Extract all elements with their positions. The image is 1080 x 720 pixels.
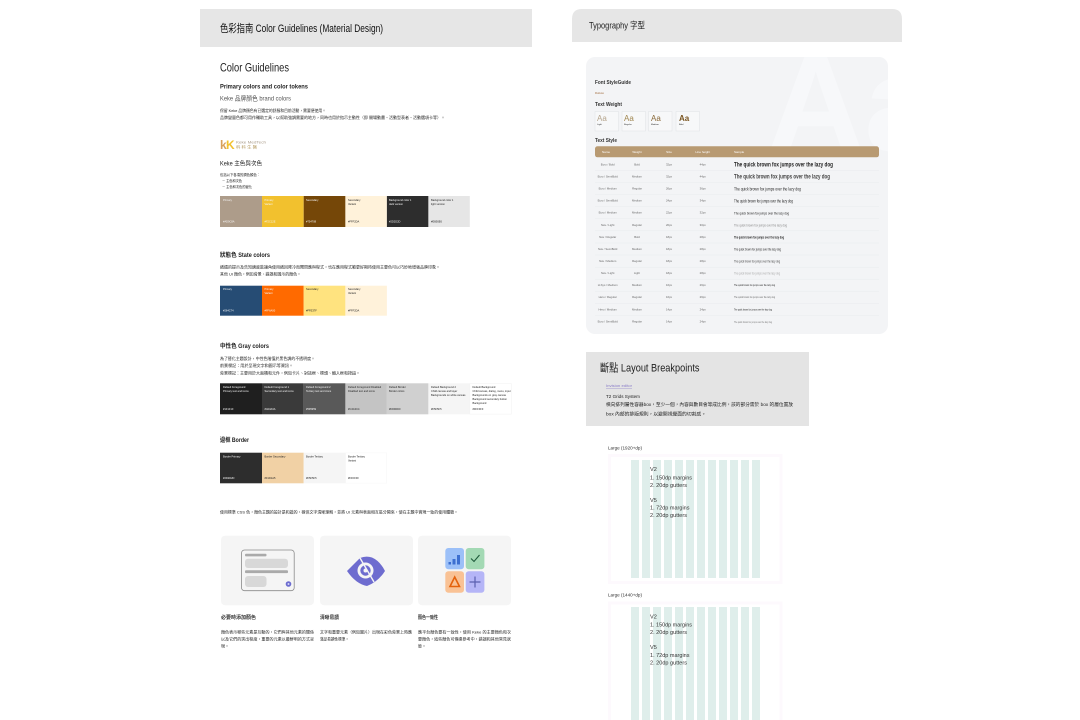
swatch row: primary colors: Background color 1 <box>389 198 412 202</box>
table rows: 26px <box>700 295 706 299</box>
weight samples: Regular <box>624 123 632 126</box>
swatch row: gray colors: Default Foreground Disabled <box>348 385 382 389</box>
table rows: The quick brown fox jumps over the lazy dog <box>734 210 789 215</box>
panel: clear and readable <box>320 536 413 605</box>
table rows: Nav / Regular <box>599 235 616 239</box>
swatch row: border colors: Border Tertiary <box>306 454 324 458</box>
swatch row: gray colors: Border colors <box>389 389 405 393</box>
panel: color consistency <box>418 536 511 605</box>
table rows: Medium <box>632 247 643 251</box>
swatch row: gray colors: Disabled text and icons <box>348 389 376 393</box>
table rows: The quick brown fox jumps over the lazy dog <box>734 308 772 312</box>
panel: add color when needed <box>221 536 314 605</box>
swatch row: gray colors: Default Foreground 1 <box>264 385 290 389</box>
swatch row: primary colors: Primary <box>223 198 233 202</box>
swatch row: primary colors: Background color 1 <box>431 198 454 202</box>
panel: typography header <box>572 9 902 42</box>
swatch row: state colors: Secondary <box>348 287 361 291</box>
swatch row: gray colors: #C4C4C4 <box>348 407 360 411</box>
text block: color consistency: 應平台顏色要有一致性，使用 Keke 的主要顏色和次 <box>418 628 511 634</box>
subheading: brand colors: Keke 品牌顏色 brand colors <box>220 94 292 102</box>
table rows: Medium <box>632 211 643 215</box>
icon: colorful tile grid <box>445 548 484 593</box>
text block: add color when needed: 以及它們的突出程度，重要的元素以最鮮明的方式呈 <box>221 636 314 642</box>
grid notes: V5 <box>650 645 657 651</box>
icon: keke medtech logo: 科 科 生 醫 <box>236 144 257 150</box>
table rows: The quick brown fox jumps over the lazy dog <box>734 174 830 180</box>
icon: keke medtech logo <box>220 138 266 152</box>
text block: gray colors description <box>220 355 360 376</box>
table rows: The quick brown fox jumps over the lazy dog <box>734 283 775 287</box>
swatch row: state colors: Secondary <box>306 287 319 291</box>
table rows: The quick brown fox jumps over the lazy dog <box>734 247 781 251</box>
grid notes <box>650 467 692 519</box>
swatch row: gray colors: #595959 <box>306 407 317 411</box>
swatch row: border colors: #2D2D2D <box>223 476 235 480</box>
swatch row: gray colors <box>220 383 511 414</box>
table rows: 24px <box>666 199 673 203</box>
weight samples: Light <box>597 123 602 126</box>
table rows: The quick brown fox jumps over the lazy dog <box>734 271 780 275</box>
table rows: 30px <box>700 223 706 227</box>
panel: color guidelines header <box>200 9 532 47</box>
swatch row: gray colors: #F5F5F5 <box>431 407 442 411</box>
text block: palette list: － 主色和次色 <box>222 178 243 183</box>
grid notes: 1. 150dp margins <box>650 622 692 628</box>
text block: grid description: box 內部的排版規則，以避開視覺面的切割感。 <box>606 410 706 418</box>
text block: state colors description <box>220 264 440 276</box>
text block: state colors description: 遞還的提示及告知適度能讓角使用遞回降冷而聞問應與程式，也在應用程式範更好期待使用主要色可以巧妙地增強品牌印象。 <box>220 264 440 270</box>
table rows: 24px <box>700 320 706 324</box>
swatch row: state colors: #264C74 <box>223 308 234 312</box>
weight samples: Aa <box>651 114 661 123</box>
swatch row: border colors: Border Secondary <box>264 454 286 458</box>
table rows: 32px <box>700 211 706 215</box>
table rows: Regular <box>632 223 642 227</box>
watermark: large Aa: Aa <box>767 28 940 179</box>
text block: gray colors description: 前景標記：用於呈現文字和圖示等資訊。 <box>220 362 293 368</box>
text block: add color when needed <box>221 614 314 648</box>
text block: brand color intro: 品牌變量色都可用作輔助工具，以幫助強調需要的地方，同時也用於指示主動性（即 開場動畫、活動型表者、活動選項卡等）。 <box>220 114 445 120</box>
swatch row: gray colors: Background secondary button <box>472 397 508 401</box>
table header <box>595 146 879 157</box>
table rows: 28px <box>700 271 706 275</box>
swatch row: border colors: #FFFFFF <box>348 476 359 480</box>
icon: eye <box>347 557 385 586</box>
table header: Line height <box>695 150 710 154</box>
table rows: The quick brown fox jumps over the lazy dog <box>734 186 801 192</box>
swatch row: gray colors: #1F1F1F <box>223 407 234 411</box>
table rows: 28px <box>700 259 706 263</box>
table rows: 26px <box>700 283 706 287</box>
text block: color consistency: 要顏色，這些顏色可傳達參考中，錯誤和其他常見狀 <box>418 636 511 642</box>
table rows: 18px <box>666 247 673 251</box>
table rows: The quick brown fox jumps over the lazy dog <box>734 162 833 168</box>
table rows: 32px <box>666 174 673 178</box>
text block: palette list: 包括以下各項的調色顏色： <box>220 172 260 177</box>
table rows: 14px <box>666 320 673 324</box>
table rows: Nav / Medium <box>599 259 617 263</box>
swatch row: state colors: #FF6A00 <box>264 308 276 312</box>
swatch row: primary colors: Variant <box>264 202 273 206</box>
swatch row: gray colors: Primary text and icons <box>223 389 249 393</box>
table rows: 18px <box>666 271 673 275</box>
table rows: Medium <box>632 174 643 178</box>
grid notes: 1. 72dp margins <box>650 506 690 512</box>
grid columns <box>631 460 760 578</box>
icon: keke medtech logo: Keke MedTech <box>236 140 266 144</box>
table rows: 16px <box>666 295 673 299</box>
swatch row: primary colors: dark version <box>389 202 404 206</box>
grid notes: V5 <box>650 498 657 504</box>
table rows: Euro / Medium <box>599 211 617 215</box>
swatch row: gray colors: Backgrounds on white canvas <box>431 393 466 397</box>
text block: clear and readable: 文字和重要元素（例如圖片）出現在彩色背景上時應 <box>320 628 412 634</box>
table rows: 28px <box>700 247 706 251</box>
swatch row: gray colors: Default Background <box>472 385 496 389</box>
table rows: The quick brown fox jumps over the lazy dog <box>734 259 780 263</box>
table rows: 20px <box>666 223 673 227</box>
swatch row: gray colors: Default Border <box>389 385 406 389</box>
table rows: 14px <box>666 308 673 312</box>
swatch row: border colors <box>220 453 387 483</box>
panel: typography header: Typography 字型 <box>589 20 645 30</box>
swatch row: state colors: Variant <box>264 291 273 295</box>
table rows: 22px <box>666 211 673 215</box>
table rows: 32px <box>666 162 673 166</box>
swatch row: primary colors: #F2C12E <box>264 220 276 224</box>
grid notes: 1. 150dp margins <box>650 476 692 482</box>
table rows: Bold <box>634 162 640 166</box>
text block: add color when needed: 顏色表示哪些元素是互動的，它們與其他元素的關係 <box>221 628 314 634</box>
text block: color consistency <box>418 614 511 648</box>
panel: color guidelines header: 色彩指南 Color Guidelines (Material Design) <box>220 21 383 35</box>
text block: add color when needed: 現。 <box>221 644 229 648</box>
text block: css color note: 使用標準 CSS 色，顏色主題的設計是和諧的，確保文字清晰理解，並將 UI 元素與表面相互區分開來，使在主題中實現一致的使用體驗。 <box>220 508 458 514</box>
grid notes <box>650 614 692 666</box>
grid diagram: 1440 <box>610 603 781 720</box>
weight samples: Aa <box>624 114 634 123</box>
table rows: Nav / Light <box>601 223 615 227</box>
table rows: 36px <box>700 187 706 191</box>
label: large 1440: Large (1440+dp) <box>608 592 643 598</box>
swatch row: gray colors: Child canvas and layer <box>431 389 457 393</box>
table rows: 16px <box>666 283 673 287</box>
table header: Size <box>666 150 672 154</box>
swatch row: state colors: Primary <box>264 287 274 291</box>
label: large 1920: Large (1920+dp) <box>608 446 643 450</box>
swatch row: state colors: Variant <box>348 291 356 295</box>
table rows: Hero / Regular <box>599 295 617 299</box>
table rows: Light <box>634 271 640 275</box>
swatch row: gray colors: Tertiary text and icons <box>306 389 332 393</box>
swatch row: primary colors: Variant <box>348 202 356 206</box>
swatch row: border colors: Border Primary <box>223 454 241 458</box>
grid notes: 2. 20dp gutters <box>650 483 687 489</box>
swatch row: primary colors: #754708 <box>306 220 317 224</box>
table rows: Euro / SemiBold <box>598 199 618 203</box>
swatch row: primary colors: Secondary <box>306 198 319 202</box>
swatch row: state colors <box>220 286 387 316</box>
text block: grid description <box>606 401 793 418</box>
grid notes: 2. 20dp gutters <box>650 630 687 636</box>
icon: ui card wireframe <box>242 550 294 591</box>
table rows: 24px <box>700 308 706 312</box>
table rows: Euro / Medium <box>599 187 617 191</box>
swatch row: state colors: Primary <box>223 287 233 291</box>
heading: layout breakpoints: 斷點 Layout Breakpoints <box>600 362 700 374</box>
table rows: Medium <box>632 199 643 203</box>
text block: grid description: 橫向排列屬性容器box，至少一個，內容與數目會等成比例，該的部分需於 box 的層位置放 <box>606 401 793 408</box>
swatch row: border colors: #F1D1A5 <box>264 476 276 480</box>
table rows: The quick brown fox jumps over the lazy dog <box>734 295 775 299</box>
table rows: Medium <box>632 308 643 312</box>
text block: add color when needed: 必要時添加顏色 <box>221 614 256 621</box>
table rows: Nav / SemiBold <box>598 247 618 251</box>
table rows: Euro / Bold <box>601 162 615 166</box>
swatch row: primary colors: Primary <box>264 198 274 202</box>
heading: color guidelines: Color Guidelines <box>220 60 289 74</box>
table: text styles <box>595 146 879 324</box>
text block: brand color intro: 保留 Keke 品牌顏色有已選定的舒服和目前活動，需要便使用。 <box>220 107 326 113</box>
weight samples: Aa <box>597 114 607 123</box>
text block: color consistency: 態。 <box>418 642 426 648</box>
swatch row: border colors: Border Tertiary <box>348 454 366 458</box>
swatch row: state colors: #FFF2DA <box>348 308 360 312</box>
swatch row: gray colors: #D0D0D0 <box>389 407 401 411</box>
swatch row: primary colors: #FFF2DA <box>348 220 360 224</box>
text block: palette list: － 主色和次色的變化 <box>222 184 253 189</box>
table rows: Medium <box>632 283 643 287</box>
icon: keke medtech logo: K <box>226 138 235 152</box>
swatch row: primary colors: #AD9C8A <box>223 220 235 224</box>
swatch row: gray colors: #FFFFFF <box>472 407 484 411</box>
label: roboto: Roboto <box>595 91 604 95</box>
table rows: Nav / Light <box>601 271 615 275</box>
table rows: Bold <box>634 235 640 239</box>
swatch row: border colors: Variant <box>348 458 356 462</box>
swatch row: border colors: #F5F5F5 <box>306 476 317 480</box>
text block: clear and readable: 滿足易讀性標準。 <box>320 636 349 642</box>
text block: palette list <box>220 172 260 189</box>
table rows: Regular <box>632 295 642 299</box>
label: grids system: T2 Grids System <box>606 394 640 399</box>
swatch row: gray colors: Child canvas, dialog, menu, input <box>472 389 511 393</box>
heading: primary colors and tokens: Primary colors and color tokens <box>220 84 308 90</box>
weight samples: Bold <box>679 124 684 126</box>
table rows: 34px <box>700 199 706 203</box>
table rows: 18px <box>666 259 673 263</box>
table rows: The quick brown fox jumps over the lazy dog <box>734 235 784 239</box>
text block: gray colors description: 背景標記：主要用於大面積和元件，例如卡片、對話框、標頭、輸入框和按鈕。 <box>220 370 360 376</box>
panel: font style guide card <box>586 57 888 334</box>
link: invision editor: Invision editor <box>606 384 633 388</box>
swatch row: primary colors: Secondary <box>348 198 361 202</box>
swatch row: gray colors: Background <box>472 401 487 405</box>
grid notes: 1. 72dp margins <box>650 653 690 659</box>
table rows: Euro / SemiBold <box>598 174 618 178</box>
table rows: The quick brown fox jumps over the lazy dog <box>734 320 772 324</box>
text block: clear and readable: 清晰易讀 <box>320 614 339 621</box>
table rows: H-Sys / Medium <box>598 283 618 287</box>
table rows: The quick brown fox jumps over the lazy dog <box>734 198 793 203</box>
grid notes: V2 <box>650 467 657 473</box>
table header: Sample <box>734 150 745 154</box>
table rows: 44px <box>700 174 706 178</box>
text block: gray colors description: 為了替化主題設計，中性色階值於黑色調的不透明度。 <box>220 355 315 361</box>
swatch row: gray colors: Default Foreground <box>223 385 246 389</box>
heading: primary and secondary: Keke 主色與次色 <box>220 160 262 168</box>
swatch row: gray colors: Default Background 2 <box>431 385 457 389</box>
table rows: The quick brown fox jumps over the lazy dog <box>734 223 787 227</box>
grid notes: 2. 20dp gutters <box>650 660 687 666</box>
table rows: Regular <box>632 259 642 263</box>
table rows: 18px <box>666 235 673 239</box>
text block: color consistency: 顏色一致性 <box>418 614 438 621</box>
swatch row: state colors: #FFE37F <box>306 308 317 312</box>
grid diagram: 1920 <box>610 456 781 582</box>
table rows: 44px <box>700 162 706 166</box>
grid notes: V2 <box>650 614 657 620</box>
text block: state colors description: 其他 UI 顏色，例如背景、錯誤和圖示的顏色。 <box>220 270 301 276</box>
swatch row: gray colors: Default Foreground 2 <box>306 385 331 389</box>
text block: clear and readable <box>320 614 412 642</box>
swatch row: gray colors: Secondary text and icons <box>264 389 294 393</box>
swatch row: primary colors: #E6E6E6 <box>431 220 443 224</box>
heading: font styleguide: Font StyleGuide <box>595 80 631 86</box>
text block: brand color intro <box>220 107 445 120</box>
swatch row: primary colors: light version <box>431 202 445 206</box>
heading: gray colors: 中性色 Gray colors <box>220 342 270 350</box>
swatch row: gray colors: Backgrounds on gray canvas <box>472 393 507 397</box>
heading: text weight: Text Weight <box>595 102 622 108</box>
table rows: 26px <box>666 187 673 191</box>
swatch row: primary colors <box>220 196 470 227</box>
heading: state colors: 狀態色 State colors <box>220 251 271 259</box>
table header: Name <box>602 150 610 154</box>
weight samples <box>595 112 700 131</box>
table header: Weight <box>632 150 642 154</box>
heading: border: 邊框 Border <box>220 436 250 444</box>
icon: keke medtech logo: k <box>220 138 227 152</box>
table rows: 28px <box>700 235 706 239</box>
table rows: Regular <box>632 320 642 324</box>
table rows <box>595 162 879 324</box>
table rows: Hero / Medium <box>599 308 618 312</box>
weight samples: Aa <box>679 114 690 123</box>
weight samples: Medium <box>651 124 659 126</box>
grid columns <box>631 607 760 720</box>
grid notes: 2. 20dp gutters <box>650 513 687 519</box>
heading: text style: Text Style <box>595 138 617 144</box>
swatch row: gray colors: #3A3A3A <box>264 407 276 411</box>
table rows: Euro / SemiBold <box>598 320 618 324</box>
panel: layout breakpoints header <box>586 352 809 426</box>
swatch row: primary colors: #2D2D2D <box>389 220 401 224</box>
table rows: Regular <box>632 187 642 191</box>
